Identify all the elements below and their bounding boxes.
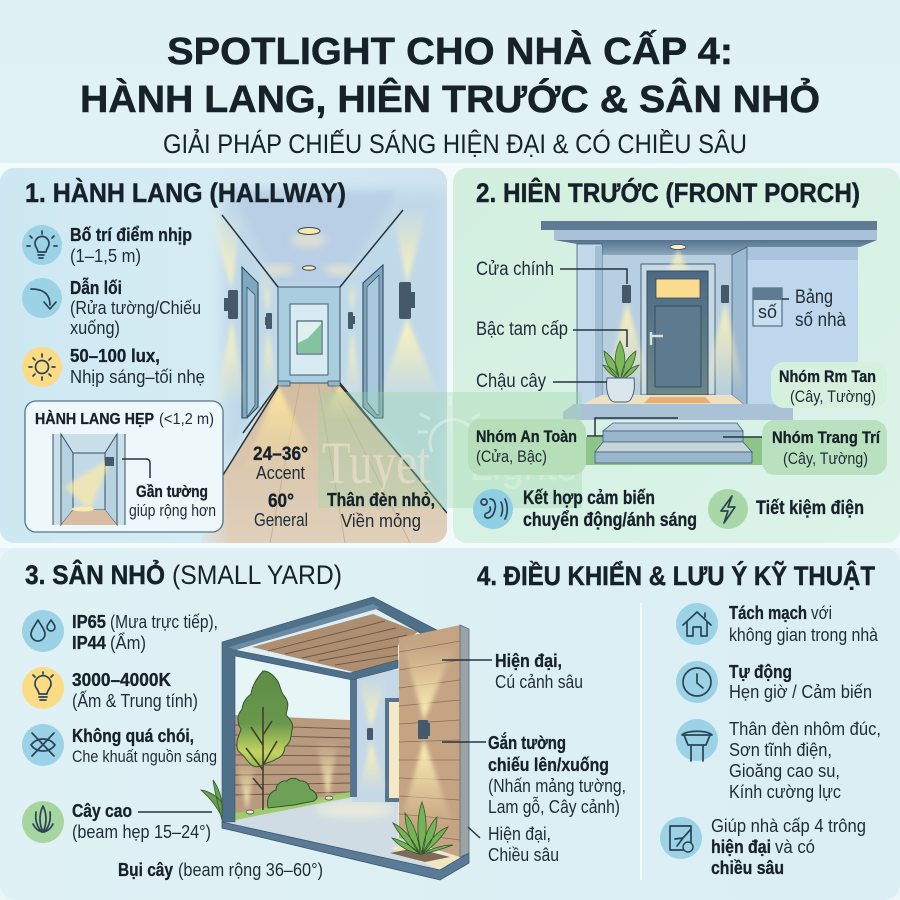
text: IP rating: IP65 [72,612,106,632]
shrub [267,778,317,808]
beam angle labels: General [254,510,308,530]
house number sign: Bảng [795,287,833,308]
icon: light bulb [22,225,62,265]
title block: GIẢI PHÁP CHIẾU SÁNG HIỆN ĐẠI & CÓ CHIỀU SÂU [163,127,747,159]
text: colour temperature: 3000–4000K [72,670,171,690]
text: automatic [729,662,872,702]
sky opening [235,653,350,722]
callout: safety group [468,418,678,475]
porch labels: Chậu cây [476,371,546,392]
callout: decorative group: (Cây, Tường) [783,449,868,468]
watermark: Lights [470,441,577,490]
text: guidance [70,277,201,338]
panel: narrow hallway inset [25,401,223,532]
plant [603,341,639,402]
title block: SPOTLIGHT CHO NHÀ CẤP 4: [167,29,733,73]
yard glows [236,645,455,825]
text: shrub beam [118,860,323,880]
yard labels: chiếu lên/xuống [488,755,609,775]
text: rhythm points [70,225,192,266]
front plant [392,802,453,854]
yard labels: (Nhấn mảng tường, [488,776,626,796]
right door [363,265,383,418]
beam angle labels [253,444,308,530]
icon: water drops [22,610,64,652]
fence [235,715,350,820]
yard labels: Lam gỗ, Cây cảnh) [488,796,620,817]
beam angle labels: Accent [256,463,305,483]
panel: narrow hallway inset: HÀNH LANG HẸP [35,409,154,428]
text: tall tree beam: (beam hẹp 15–24°) [72,822,211,842]
text: shrub beam: (beam rộng 36–60°) [178,860,323,880]
heading: small yard [25,558,342,590]
text: materials: Sơn tĩnh điện, [729,740,832,760]
porch labels: Bậc tam cấp [476,319,568,340]
porch labels [476,259,627,392]
white strip under header [0,163,900,548]
callout: safety group: (Cửa, Bậc) [476,447,547,466]
text: tall tree beam [72,801,212,842]
text: IP rating: (Mưa trực tiếp), [110,612,218,632]
text: materials: Gioăng cao su, [729,761,840,781]
text: result: chiều sâu [711,858,784,878]
text: energy saving: Tiết kiệm điện [756,498,864,519]
text: IP rating: (Ẩm) [110,632,146,653]
callout: diffuse group [771,362,887,408]
icon: lamp body [676,719,718,761]
tree [237,671,293,810]
title block: HÀNH LANG, HIÊN TRƯỚC & SÂN NHỎ [80,77,820,121]
text: colour temperature [72,670,198,711]
text: lux: Nhịp sáng–tối nhẹ [70,367,205,387]
panel 3 and 4 background [0,548,900,900]
panel 2: front porch [453,168,900,543]
text: tall tree beam: Cây cao [72,801,132,821]
text: sensors [523,488,697,531]
ceiling lights [298,228,320,234]
porch labels: Cửa chính [476,259,554,280]
text: no glare: Không quá chói, [72,726,194,746]
slim fixture label: Viền mỏng [341,511,421,531]
yard labels: Chiều sâu [488,845,559,865]
text: result: và có [775,837,815,857]
divider [640,603,642,880]
text: IP rating [72,612,218,653]
frame [222,597,437,822]
porch glows [602,250,745,393]
yard labels: Cú cảnh sâu [495,672,583,692]
icon: guiding arrow [22,278,62,318]
house number sign: số nhà [795,310,846,331]
icon: no glare eye [22,724,64,766]
back wall and door [352,670,400,802]
callout: diffuse group: (Cây, Tường) [790,387,876,406]
heading: small yard: 3. SÂN NHỎ [25,558,165,590]
icon: warm bulb [22,667,64,709]
slim fixture label: Thân đèn nhỏ, [327,490,435,510]
icon: motion sensor [473,489,513,529]
porch illustration [541,221,877,465]
panel 1: hallway [0,168,447,544]
heading: hallway: 1. HÀNH LANG (HALLWAY) [25,177,346,208]
text: separate circuit: Tách mạch [729,603,807,623]
yard labels: Hiện đại, [488,824,551,844]
text: rhythm points: (1–1,5 m) [70,246,141,266]
text: lux [70,346,205,387]
sconces [224,282,415,329]
panel: narrow hallway inset: (<1,2 m) [159,411,214,428]
yard pergola illustration [201,597,469,880]
callout: diffuse group: Nhóm Rm Tan [779,367,876,386]
hallway illustration [196,190,447,544]
text: IP rating: IP44 [72,633,106,653]
yard labels: Hiện đại, [495,651,562,671]
callout: decorative group: Nhóm Trang Trí [772,428,881,447]
panel: narrow hallway inset: giúp rộng hơn [129,501,216,520]
text: guidance: Dẫn lối [70,277,122,298]
icon: sun [22,347,62,387]
text: sensors: Kết hợp cảm biến [523,488,655,509]
mini hallway drawing [53,434,125,525]
watermark [318,392,582,508]
slim fixture label [327,490,435,531]
floor [222,798,460,870]
text: guidance: xuống) [70,318,120,338]
house number sign [753,287,846,331]
callout: decorative group [723,420,887,475]
text: automatic: Hẹn giờ / Cảm biến [729,682,872,702]
callout: safety group: Nhóm An Toàn [476,427,577,446]
text: separate circuit: với [811,603,832,623]
text: materials: Kính cường lực [729,782,841,802]
icon: house [676,603,718,645]
heading: front porch: 2. HIÊN TRƯỚC (FRONT PORCH) [476,177,860,208]
house number sign: số [758,302,777,322]
wood wall [399,625,460,857]
left plant [201,780,222,820]
yard labels [442,651,626,865]
icon: grass [22,801,64,843]
text: no glare [72,726,217,766]
yard labels: Gắn tường [488,732,566,753]
text: shrub beam: Bụi cây [118,860,173,880]
text: result: hiện đại [711,837,771,857]
text: result: Giúp nhà cấp 4 trông [711,816,866,836]
left door [242,267,258,418]
text: sensors: chuyển động/ánh sáng [523,510,697,531]
title block [80,29,820,159]
panel: narrow hallway inset: Gần tường [136,482,208,501]
text: materials [729,719,881,802]
watermark: Tuyet [322,430,430,496]
text: lux: 50–100 lux, [70,346,160,366]
icon: switch timer [660,817,702,859]
text: result [711,816,866,878]
text: separate circuit: không gian trong nhà [729,625,879,645]
text: no glare: Che khuất nguồn sáng [72,747,217,766]
beam angle labels: 60° [268,491,294,512]
ceiling [252,614,418,672]
text: materials: Thân đèn nhôm đúc, [729,719,881,739]
text: separate circuit [729,603,879,645]
base [222,822,469,880]
text: guidance: (Rửa tường/Chiếu [70,298,201,318]
heading: small yard: (SMALL YARD) [172,560,342,590]
icon: clock [676,661,718,703]
glows [214,218,434,461]
beam angle labels: 24–36° [253,444,308,465]
text: automatic: Tự động [729,662,792,682]
text: rhythm points: Bố trí điểm nhịp [70,225,192,245]
text: colour temperature: (Ấm & Trung tính) [72,690,198,711]
icon: lightning bolt [708,489,748,529]
